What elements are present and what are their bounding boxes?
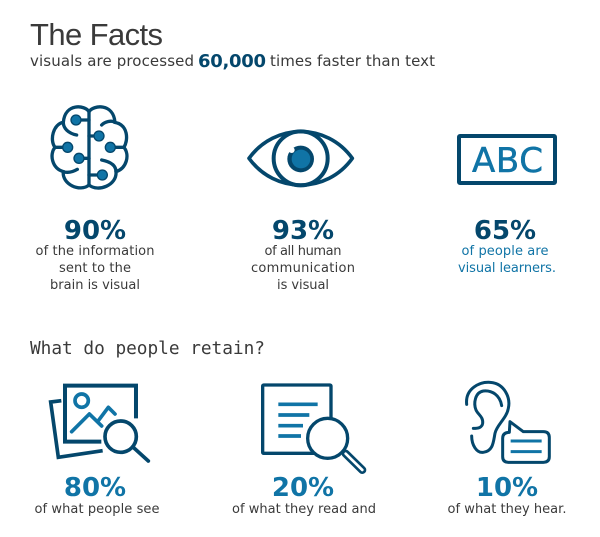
title: The Facts xyxy=(30,17,163,52)
subtitle: visuals are processed xyxy=(30,52,194,70)
stat: 93%: communication xyxy=(251,261,355,276)
icon: brain xyxy=(52,107,127,188)
stat: 65% xyxy=(458,216,556,276)
icon: ABC xyxy=(459,136,555,183)
subtitle: 60,000 xyxy=(198,51,266,72)
stat: 93%: of all human xyxy=(264,244,342,259)
icon: ABC: ABC xyxy=(472,141,543,181)
icon: document with magnifier xyxy=(263,385,362,470)
subtitle xyxy=(30,51,435,72)
stat: 80%: of what people see xyxy=(34,502,160,517)
subtitle: times faster than text xyxy=(270,52,435,70)
section heading: What do people retain? xyxy=(30,338,265,359)
stat: 90%: brain is visual xyxy=(50,278,140,293)
icon: ear with speech bubble xyxy=(467,382,549,462)
stat: 10%: of what they hear. xyxy=(448,502,566,517)
stat: 93%: 93% xyxy=(272,216,334,246)
stat: 20%: of what they read and xyxy=(232,502,376,517)
icon: image with magnifier xyxy=(51,386,148,461)
stat: 93%: is visual xyxy=(277,278,329,293)
stat: 90%: 90% xyxy=(64,216,126,246)
stat: 90%: sent to the xyxy=(59,261,131,276)
stat: 10%: 10% xyxy=(476,473,538,503)
stat: 80% xyxy=(34,473,160,517)
stat: 93% xyxy=(251,216,355,293)
stat: 90% xyxy=(36,216,154,293)
stat: 20% xyxy=(232,473,376,517)
stat: 65%: 65% xyxy=(474,216,536,246)
stat: 65%: of people are xyxy=(462,244,548,259)
stat: 90%: of the information xyxy=(36,244,154,259)
stat: 65%: visual learners. xyxy=(458,261,556,276)
stat: 10% xyxy=(448,473,566,517)
stat: 20%: 20% xyxy=(272,473,334,503)
stat: 80%: 80% xyxy=(64,473,126,503)
icon: eye xyxy=(249,131,352,185)
